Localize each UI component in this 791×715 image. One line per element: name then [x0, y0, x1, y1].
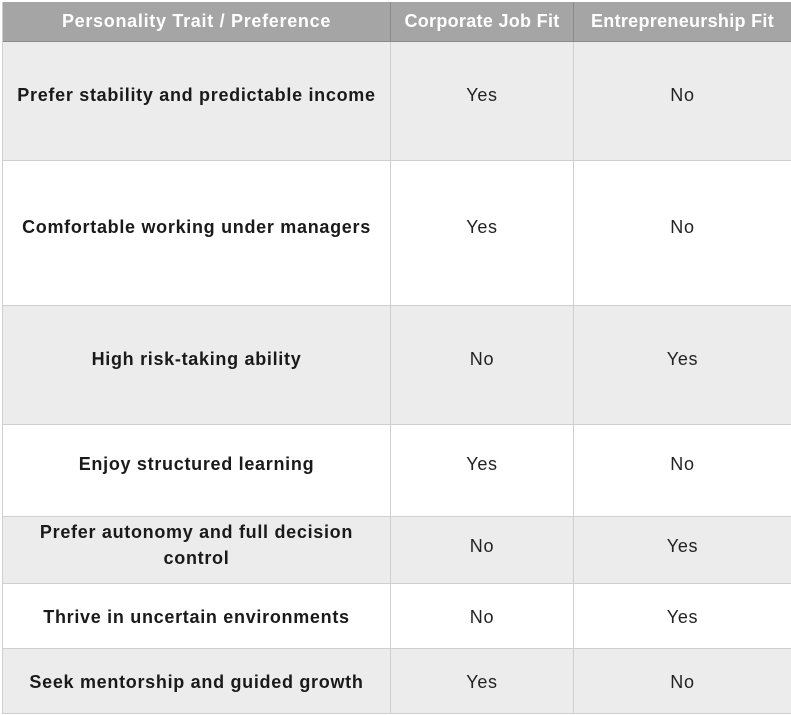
- row: structured learning: No: [670, 454, 695, 474]
- row: uncertain: [3, 584, 791, 649]
- row: managers: Comfortable working under managers: [22, 216, 371, 236]
- row: stability: [3, 42, 791, 161]
- row: autonomy: No: [470, 536, 494, 556]
- row: risk: High risk-taking ability: [92, 348, 301, 368]
- row: managers: No: [670, 216, 695, 236]
- row: uncertain: Yes: [667, 606, 698, 626]
- row: autonomy: Yes: [667, 536, 698, 556]
- row: mentorship: Yes: [466, 672, 498, 692]
- row: managers: [3, 161, 791, 306]
- header row: Corporate Job Fit: [404, 11, 560, 31]
- header row: Entrepreneurship Fit: [591, 11, 774, 31]
- row: autonomy: control: [164, 548, 229, 568]
- row: stability: Yes: [466, 84, 498, 104]
- row: structured learning: Yes: [466, 454, 498, 474]
- row: mentorship: No: [670, 672, 695, 692]
- row: risk: [3, 306, 791, 425]
- header row: Personality Trait / Preference: [62, 11, 331, 31]
- row: risk: Yes: [667, 348, 698, 368]
- row: mentorship: Seek mentorship and guided growth: [29, 672, 364, 692]
- row: mentorship: [3, 649, 791, 714]
- row: uncertain: No: [470, 606, 494, 626]
- row: risk: No: [470, 348, 494, 368]
- row: structured learning: Enjoy structured learning: [79, 454, 314, 474]
- header row: [3, 2, 791, 42]
- row: uncertain: Thrive in uncertain environments: [43, 606, 350, 626]
- row: structured learning: [3, 425, 791, 517]
- row: autonomy: [3, 517, 791, 584]
- row: stability: Prefer stability and predictable income: [17, 84, 376, 104]
- row: autonomy: Prefer autonomy and full decision: [40, 522, 353, 542]
- row: managers: Yes: [466, 216, 498, 236]
- row: stability: No: [670, 84, 695, 104]
